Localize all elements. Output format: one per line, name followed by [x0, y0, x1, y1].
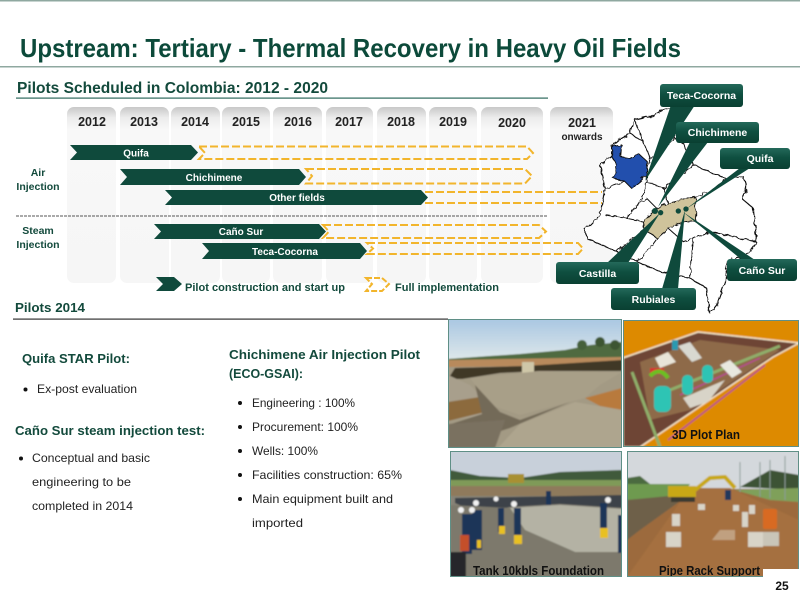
year labels: 2018 — [387, 115, 415, 129]
label: steam injection: Injection — [16, 239, 60, 251]
year labels: 2020 — [498, 116, 526, 130]
callout: cano sur: Caño Sur — [739, 265, 785, 277]
text block: quifa star pilot: Ex-post evaluation — [37, 382, 137, 396]
text block: chichimene air injection pilot: Procurement: 100% — [252, 420, 358, 434]
callout: chichimene: Chichimene — [688, 127, 747, 139]
photo: 3d plot plan: 3D Plot Plan — [672, 427, 740, 442]
bar: quifa: Quifa — [123, 148, 149, 160]
photo: tank foundation: Tank 10kbls Foundation — [473, 563, 604, 578]
callout: rubiales — [611, 210, 696, 310]
heading: pilots scheduled: Pilots Scheduled in Colombia: 2012 - 2020 — [17, 80, 328, 97]
photo: pipe rack support: Pipe Rack Support — [659, 563, 761, 578]
label: air injection: Injection — [16, 181, 60, 193]
photo: 3d plot plan — [623, 320, 799, 447]
callout: castilla — [556, 213, 660, 284]
legend: full implementation: Full implementation — [395, 282, 499, 294]
bar: cano sur: Caño Sur — [219, 227, 263, 238]
label: air injection: Air — [31, 167, 45, 179]
text block: cano sur steam injection test — [15, 423, 205, 513]
text block: chichimene air injection pilot — [229, 347, 421, 530]
year labels: 2017 — [335, 115, 363, 129]
year labels: 2019 — [439, 115, 467, 129]
text block: cano sur steam injection test: Conceptual and basic — [32, 451, 150, 465]
label: steam injection — [16, 225, 60, 251]
year labels: 2013 — [130, 115, 158, 129]
bar: chichimene: Chichimene — [186, 173, 243, 184]
text block: chichimene air injection pilot: Chichimene Air Injection Pilot — [229, 347, 421, 362]
label: air injection — [16, 167, 60, 193]
callout: teca-cocorna: Teca-Cocorna — [667, 90, 736, 102]
year labels: 2015 — [232, 115, 260, 129]
callout: quifa — [686, 148, 790, 209]
bar: chichimene — [120, 169, 306, 185]
text block: cano sur steam injection test: Caño Sur steam injection test: — [15, 423, 205, 438]
text block: chichimene air injection pilot: Engineering : 100% — [252, 396, 355, 410]
callout: cano sur — [683, 212, 797, 281]
year labels: 2014 — [181, 115, 209, 129]
bar: cano sur — [154, 224, 326, 239]
text block: quifa star pilot — [22, 351, 137, 396]
heading: pilots 2014: Pilots 2014 — [15, 300, 86, 315]
year labels: onwards — [561, 132, 603, 143]
title: Upstream: Tertiary - Thermal Recovery in Heavy Oil Fields — [20, 33, 681, 63]
bar: other fields — [165, 190, 428, 205]
callout: rubiales: Rubiales — [632, 294, 676, 306]
bar: other fields: Other fields — [269, 193, 325, 204]
text block: chichimene air injection pilot: Main equipment built and — [252, 492, 393, 506]
full implementation dashed arrows — [199, 146, 602, 254]
year labels: 2012 — [78, 115, 106, 129]
page number: 25 — [775, 579, 789, 593]
text block: chichimene air injection pilot: (ECO-GSAI): — [229, 366, 303, 381]
label: steam injection: Steam — [22, 225, 54, 237]
photo: pipe rack support — [627, 451, 799, 578]
callout: teca-cocorna — [645, 84, 743, 181]
text block: cano sur steam injection test: engineering to be — [32, 475, 131, 489]
bar: quifa — [70, 145, 198, 160]
legend: pilot construction — [156, 277, 345, 294]
text block: quifa star pilot: Quifa STAR Pilot: — [22, 351, 130, 366]
timeline year columns — [67, 107, 613, 283]
callout: chichimene — [658, 122, 759, 207]
year labels: 2021 — [568, 116, 596, 130]
callout: castilla: Castilla — [579, 268, 616, 280]
legend: full implementation — [366, 278, 499, 294]
photo: excavation site — [448, 319, 622, 448]
text block: chichimene air injection pilot: imported — [252, 516, 303, 530]
text block: cano sur steam injection test: completed in 2014 — [32, 499, 133, 513]
bar: teca-cocorna: Teca-Cocorna — [252, 247, 318, 258]
legend: pilot construction: Pilot construction and start up — [185, 282, 345, 294]
year labels — [78, 115, 603, 143]
bar: teca-cocorna — [202, 243, 367, 259]
text block: chichimene air injection pilot: Wells: 100% — [252, 444, 318, 458]
photo: tank foundation — [450, 451, 622, 578]
text block: chichimene air injection pilot: Facilities construction: 65% — [252, 468, 402, 482]
callout: quifa: Quifa — [747, 153, 774, 165]
map of colombia — [585, 105, 757, 313]
year labels: 2016 — [284, 115, 312, 129]
